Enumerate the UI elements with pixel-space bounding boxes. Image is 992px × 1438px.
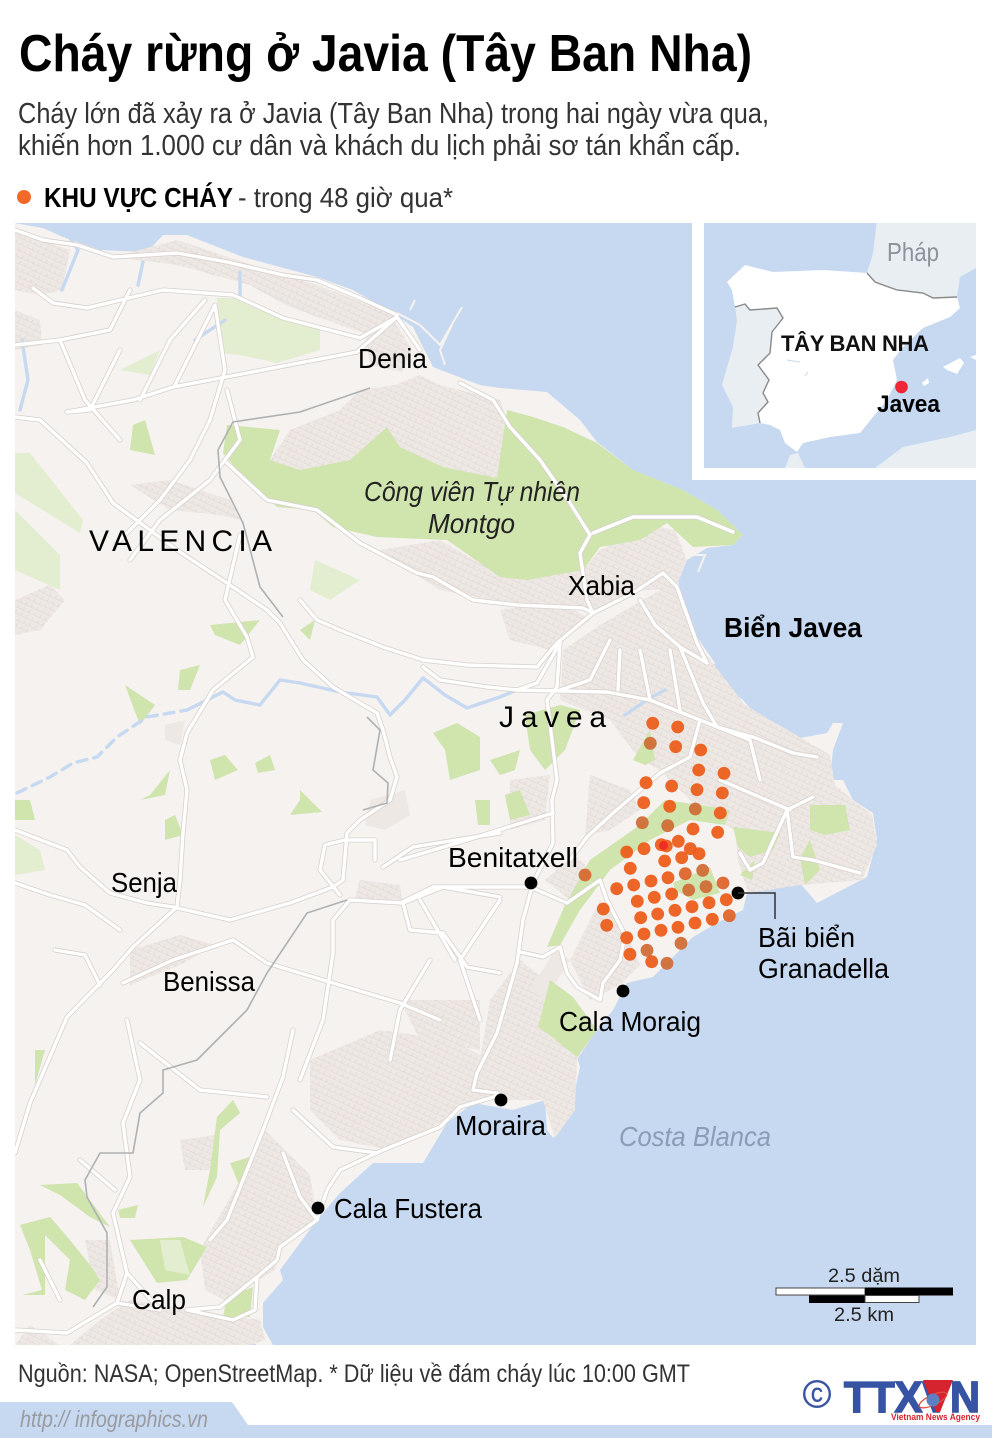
map labels bbox=[89, 343, 889, 1315]
map labels: Benissa bbox=[163, 966, 255, 997]
legend: fire area: KHU VỰC CHÁY bbox=[44, 182, 233, 213]
copyright icon bbox=[804, 1381, 830, 1407]
location markers bbox=[312, 877, 744, 1214]
map labels: Bãi biển bbox=[758, 922, 855, 953]
leader line: Granadella bbox=[738, 893, 775, 919]
panel: locator inset map bbox=[692, 220, 976, 480]
logo: TTXVN: Vietnam News Agency bbox=[891, 1412, 981, 1423]
intro text bbox=[18, 98, 769, 162]
title: Cháy rừng ở Javia (Tây Ban Nha) bbox=[19, 25, 752, 83]
rail lines bbox=[85, 388, 388, 1307]
panel: locator inset map: Javea bbox=[877, 391, 941, 418]
footer band bbox=[0, 1402, 992, 1438]
land bbox=[14, 223, 877, 1345]
park: Montgo bbox=[223, 410, 743, 580]
soft pink patches bbox=[165, 720, 570, 1000]
copyright icon: C bbox=[811, 1384, 823, 1407]
scale bar: 2.5 dặm bbox=[828, 1266, 900, 1287]
map labels: Biển Javea bbox=[724, 612, 862, 643]
green areas bbox=[15, 420, 850, 1317]
map labels: Moraira bbox=[455, 1110, 546, 1141]
map labels: Công viên Tự nhiên bbox=[364, 476, 580, 507]
map labels: Denia bbox=[358, 343, 427, 374]
legend: fire area bbox=[17, 182, 453, 213]
map labels: Costa Blanca bbox=[619, 1121, 771, 1152]
river bbox=[17, 235, 665, 793]
road network bbox=[15, 230, 860, 1333]
map labels: Cala Moraig bbox=[559, 1006, 701, 1037]
map labels: Cala Fustera bbox=[334, 1193, 482, 1224]
legend: fire area: - trong 48 giờ qua* bbox=[238, 182, 453, 213]
panel: main map bbox=[14, 223, 976, 1345]
footer url: http:// infographics.vn bbox=[20, 1406, 208, 1432]
inset: Spain bbox=[727, 265, 960, 452]
panel: locator inset map: Pháp bbox=[887, 237, 939, 267]
inset: Africa bbox=[785, 453, 805, 468]
intro text: Cháy lớn đã xảy ra ở Javia (Tây Ban Nha) trong hai ngày vừa qua, bbox=[18, 98, 769, 130]
inset: islands bbox=[943, 358, 964, 374]
map labels: Xabia bbox=[568, 570, 635, 601]
map labels: Senja bbox=[111, 867, 177, 898]
scale bar bbox=[776, 1266, 953, 1326]
scale bar: 2.5 km bbox=[834, 1305, 894, 1326]
harbour piers bbox=[397, 300, 705, 572]
map labels: Javea bbox=[499, 701, 606, 734]
map labels: VALENCIA bbox=[89, 525, 272, 558]
intro text: khiến hơn 1.000 cư dân và khách du lịch phải sơ tán khẩn cấp. bbox=[18, 130, 741, 162]
inset: borders bbox=[735, 273, 957, 423]
logo: TTXVN: TTXVN bbox=[844, 1373, 980, 1422]
map labels: Benitatxell bbox=[448, 842, 578, 873]
urban areas bbox=[15, 232, 877, 1345]
map labels: Granadella bbox=[758, 953, 889, 984]
fire dots bbox=[579, 717, 736, 970]
inset: France bbox=[867, 220, 976, 298]
panel: locator inset map: TÂY BAN NHA bbox=[781, 331, 929, 356]
source note: Nguồn: NASA; OpenStreetMap. * Dữ liệu về đám cháy lúc 10:00 GMT bbox=[18, 1360, 690, 1388]
map labels: Calp bbox=[132, 1284, 186, 1315]
inset: Portugal bbox=[722, 304, 783, 428]
map labels: Montgo bbox=[428, 508, 515, 539]
